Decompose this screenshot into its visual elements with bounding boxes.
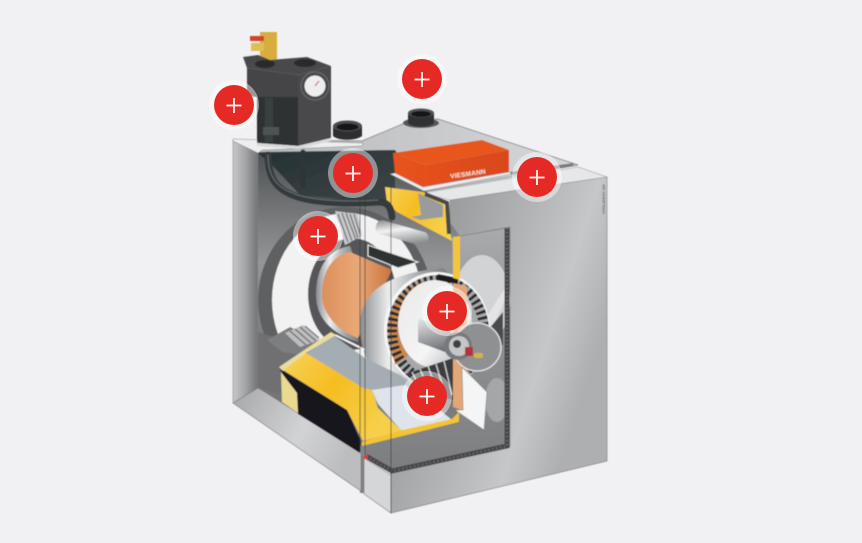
- model text on casing: VITOLADENS 300: [602, 184, 606, 214]
- hotspot 1: [209, 80, 259, 130]
- brass valve: [250, 32, 277, 60]
- pale insulation side: [281, 372, 298, 413]
- hotspot 7: [402, 371, 452, 421]
- control unit orange box: [393, 140, 509, 187]
- gasket upper mount: [436, 274, 458, 284]
- red sensor detail: [364, 455, 368, 459]
- yellow strip vertical: [453, 236, 460, 280]
- heat exchanger ribs: [335, 211, 362, 245]
- cream insulation edge: [279, 332, 336, 371]
- white shelf strip: [390, 172, 512, 191]
- burner tube: [418, 318, 470, 352]
- radial fins: [392, 280, 484, 382]
- top face of right block: [423, 167, 607, 200]
- interior cavity: [258, 150, 510, 473]
- right wall with cutaway window and plinth: [391, 177, 607, 513]
- front plinth: [364, 458, 391, 513]
- left wall overlap: [258, 332, 340, 410]
- large silver drum: [360, 268, 455, 398]
- steel tray: [306, 335, 450, 430]
- pressure gauge: [301, 72, 329, 100]
- hotspot 6: [422, 286, 472, 336]
- yellow tray rim: [362, 412, 459, 446]
- safety block: [243, 32, 331, 149]
- flue socket 2: [403, 108, 439, 128]
- burner plate: [453, 323, 501, 371]
- flue socket 1: [333, 120, 362, 140]
- block top: [243, 55, 331, 75]
- inner burner chamber: [384, 272, 490, 388]
- silver collar behind orange drum: [316, 246, 362, 342]
- copper chamber: [388, 280, 430, 365]
- burner head: [444, 332, 483, 360]
- translucent door edges: [360, 150, 391, 513]
- flue pipe dark ring: [258, 207, 432, 393]
- right window interior: [365, 228, 508, 470]
- hotspot 3: [328, 148, 378, 198]
- left casing column: [233, 141, 258, 403]
- hotspot 2: [397, 54, 447, 104]
- silver bracket upper: [411, 193, 443, 220]
- speckled block edge: [425, 194, 449, 234]
- top pale support plate: [233, 139, 363, 153]
- speckled insulation edge: [366, 228, 507, 471]
- boiler illustration: [233, 32, 607, 513]
- lower ribbed block: [267, 325, 328, 356]
- white rail: [335, 335, 365, 350]
- door gap: [360, 452, 365, 493]
- silver tube upper: [374, 219, 430, 247]
- block recess: [257, 97, 298, 146]
- white combustion dome: [272, 213, 422, 387]
- black insulation side: [280, 369, 361, 453]
- water pipes: [268, 152, 392, 217]
- lower drum floor wedge: [405, 358, 453, 400]
- fan housing: [454, 255, 510, 422]
- hotspot 5: [293, 211, 343, 261]
- left plinth: [233, 388, 361, 491]
- top cover of casing: [258, 119, 578, 192]
- top bracket: [368, 245, 418, 268]
- yellow insulation upper: [385, 187, 452, 241]
- upper dark chamber: [258, 150, 395, 205]
- hotspot 4: [512, 152, 562, 202]
- yellow insulation lower: [280, 353, 402, 441]
- orange gasket strip: [453, 283, 467, 412]
- grey rail strip: [510, 163, 574, 175]
- viessmann logo: VIESMANN: [450, 169, 486, 180]
- inner cone: [398, 280, 472, 368]
- orange drum: [322, 252, 392, 338]
- block front: [247, 68, 298, 98]
- inner dark collar: [308, 238, 396, 350]
- block right: [298, 66, 331, 146]
- white burner mount: [455, 367, 487, 430]
